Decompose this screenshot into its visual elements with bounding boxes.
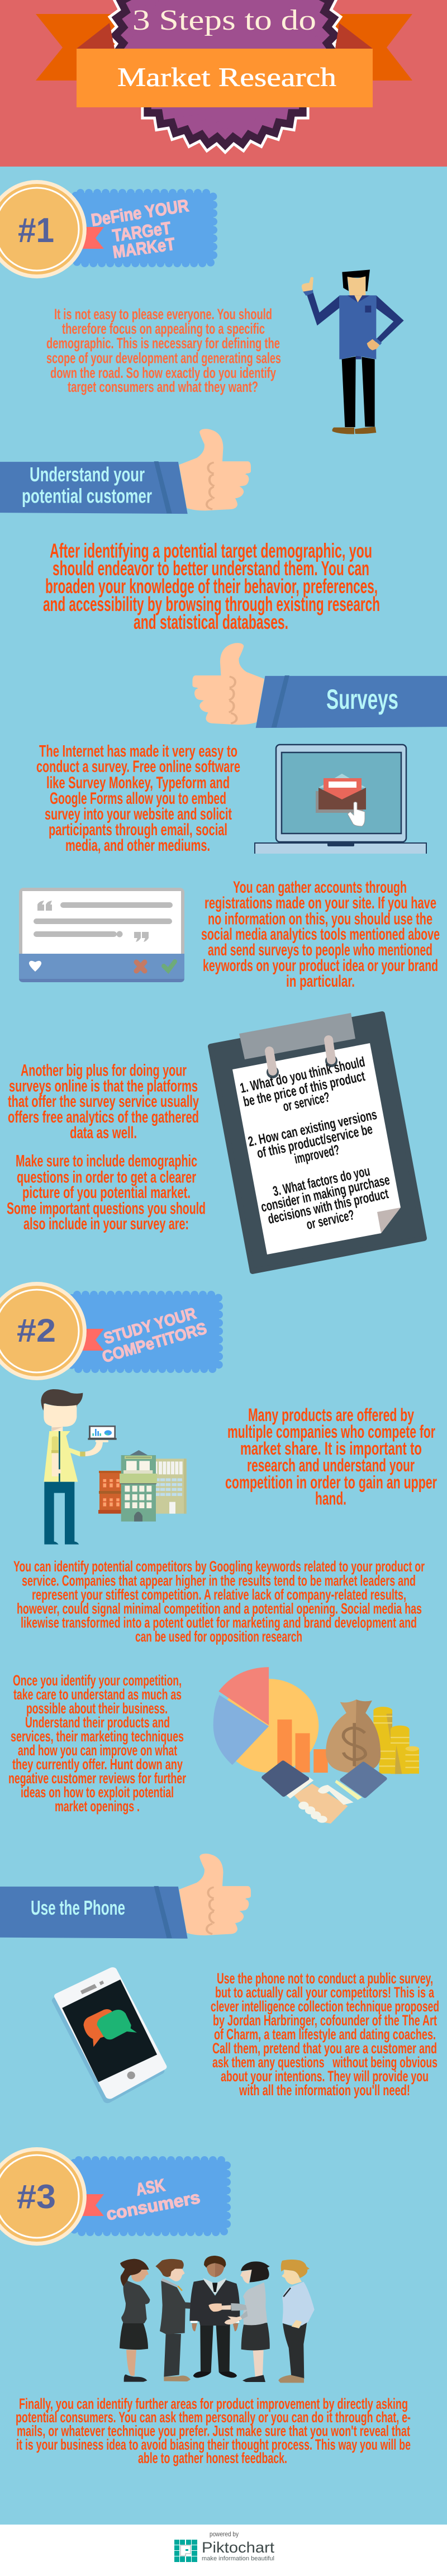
- title line two: Market Research: [117, 63, 336, 92]
- paragraph: analytics and demographics: Another big plus for doing your: [21, 1061, 187, 1080]
- quote marks: [37, 901, 149, 942]
- paragraph: online surveys: The Internet has made it very easy to: [39, 742, 237, 761]
- scalloped label: [75, 193, 213, 263]
- ribbon tails: [36, 14, 412, 80]
- piktochart wordmark: Piktochart: [202, 2539, 275, 2556]
- woman in grey jacket: [222, 2261, 270, 2382]
- intro paragraph: therefore focus on appealing to a specific: [62, 320, 265, 337]
- number 1: #1: [18, 211, 54, 250]
- medal 1: [0, 180, 104, 278]
- heading text: Surveys: [326, 684, 398, 715]
- paragraph: understand competition: Understand their products and: [25, 1714, 170, 1731]
- paragraph: online surveys: media, and other mediums.: [65, 836, 210, 855]
- office buildings: [98, 1450, 187, 1522]
- question list: consider in making purchase: [260, 1172, 391, 1215]
- number 3: #3: [17, 2178, 56, 2215]
- icon: cross: [136, 962, 145, 971]
- heading text: Understand your: [30, 463, 145, 486]
- paragraph: understand competition: ideas on how to exploit potential: [21, 1784, 174, 1801]
- intro paragraph: [46, 306, 281, 395]
- paragraph: understand competition: take care to understand as much as: [13, 1686, 182, 1703]
- paragraph: identify competitors: [13, 1558, 425, 1645]
- heading: understand your potential customer: [0, 429, 251, 514]
- man in centre: [189, 2256, 240, 2378]
- thumbs up sleeve mirrored: [192, 643, 447, 728]
- thumbs up sleeve: [0, 1854, 251, 1939]
- icon: feedback card: [19, 888, 184, 982]
- medal 2: [0, 1282, 104, 1380]
- paragraph: online surveys: survey into your website and solicit: [45, 805, 232, 823]
- icon: check: [164, 962, 175, 970]
- intro paragraph: It is not easy to please everyone. You should: [54, 306, 272, 323]
- paragraph: understand competition: [8, 1672, 186, 1815]
- scalloped label: [73, 2160, 227, 2232]
- paragraph: understanding customers: and statistical databases.: [134, 610, 288, 633]
- step 3 title: consumers: [104, 2187, 202, 2224]
- paragraph: use the phone: [211, 1970, 439, 2099]
- heading text: Use the Phone: [31, 1896, 125, 1919]
- paragraph: online surveys: Google Forms allow you to embed: [50, 789, 226, 808]
- paragraph: analytics and demographics: that offer the survey service usually: [8, 1092, 199, 1111]
- chat bubbles: [83, 2009, 137, 2047]
- footer: [0, 2525, 447, 2576]
- money bag: [326, 1699, 381, 1773]
- heading: use the phone: [0, 1854, 251, 1939]
- header panel: [0, 0, 447, 203]
- coin stacks: [373, 1707, 419, 1774]
- paragraph: analytics and demographics: data as well.: [70, 1124, 137, 1142]
- main banner: [77, 49, 373, 107]
- paragraph: analytics and demographics: surveys online is that the platforms: [9, 1077, 198, 1096]
- paragraph: understand competition: negative customer reviews for further: [8, 1770, 186, 1787]
- pie chart: [213, 1667, 318, 1773]
- woman with crossed arms: [120, 2259, 150, 2382]
- question list: 1. What do you think should: [239, 1054, 367, 1096]
- closing paragraph: able to gather honest feedback.: [138, 2450, 287, 2466]
- medal 3: [0, 2147, 104, 2246]
- question list: be the price of this product: [242, 1068, 367, 1110]
- paragraph: analytics and demographics: Some important questions you should: [7, 1199, 206, 1218]
- step 2 heading: [0, 1282, 219, 1380]
- handshake: [208, 2303, 222, 2312]
- powered by: powered by: [210, 2530, 239, 2538]
- step 1 title: TARGeT: [111, 218, 172, 245]
- illustration: smartphone with chat bubbles: [56, 1971, 163, 2100]
- bar chart: [277, 1720, 328, 1773]
- question list: decisions with this product: [267, 1186, 390, 1227]
- icon: heart: [29, 961, 41, 972]
- step 1 title: [90, 196, 190, 262]
- closing paragraph: [16, 2395, 411, 2466]
- paragraph: online surveys: participants through email, social: [49, 821, 227, 839]
- intro paragraph: target consumers and what they want?: [68, 378, 258, 395]
- paragraph: many products: [225, 1405, 437, 1508]
- paragraph: analytics and demographics: questions in order to get a clearer: [17, 1168, 196, 1187]
- question list: 3. What factors do you: [272, 1163, 372, 1200]
- title line one: 3 Steps to do: [132, 4, 316, 36]
- question list: of this product/service be: [255, 1121, 374, 1162]
- step 1 title: MARKeT: [112, 234, 176, 262]
- thumbs up sleeve: [0, 429, 251, 514]
- paragraph: understand competition: possible about their business.: [26, 1700, 168, 1717]
- question list: improved?: [293, 1142, 341, 1167]
- paragraph: many products: hand.: [315, 1488, 346, 1508]
- intro paragraph: demographic. This is necessary for defining the: [46, 335, 280, 352]
- illustration: charts, money and handshake: [213, 1667, 419, 1824]
- scalloped label: [72, 1295, 219, 1369]
- number 2: #2: [17, 1313, 56, 1349]
- question list: or service?: [305, 1207, 356, 1233]
- heading: surveys: [192, 643, 447, 728]
- step 3 heading: [0, 2147, 227, 2246]
- tagline: make information beautiful: [202, 2555, 274, 2562]
- paragraph: online surveys: [36, 742, 240, 855]
- handshake: [264, 1763, 385, 1824]
- question list: [239, 1054, 391, 1233]
- paragraph: understand competition: market openings .: [55, 1798, 140, 1815]
- intro paragraph: down the road. So how exactly do you identify: [50, 364, 276, 381]
- illustration: man giving thumbs up: [302, 269, 404, 434]
- paragraph: understand competition: and how you can improve on what: [18, 1742, 177, 1759]
- question list: or service?: [282, 1090, 331, 1115]
- step 2 title: STUDY YOUR: [102, 1305, 198, 1348]
- paragraph: analytics and demographics: offers free analytics of the gathered: [8, 1108, 199, 1126]
- step 2 title: COMPeTITORS: [100, 1319, 209, 1366]
- paragraph: online surveys: conduct a survey. Free online software: [36, 757, 240, 776]
- paragraph: understand competition: Once you identify your competition,: [13, 1672, 182, 1689]
- clipboard with survey questions: [211, 1013, 424, 1271]
- step 1 title: DeFine YOUR: [90, 196, 190, 230]
- icon: laptop with email: [254, 745, 427, 854]
- paragraph: understanding customers: [43, 539, 380, 633]
- paragraph: understand competition: they currently offer. Hunt down any: [12, 1756, 183, 1773]
- paragraph: analytics and demographics: [7, 1061, 206, 1233]
- paragraph: analytics and demographics: also include in your survey are:: [23, 1215, 189, 1233]
- paragraph: understand competition: services, their marketing techniques: [11, 1728, 184, 1745]
- heading text: [22, 463, 152, 508]
- piktochart logo mark: [174, 2540, 197, 2562]
- ribbon folds: [77, 23, 373, 49]
- heading text: potential customer: [22, 484, 152, 508]
- man in blue shirt: [278, 2260, 315, 2383]
- illustration: five business people: [120, 2256, 315, 2383]
- paragraph: online surveys: like Survey Monkey, Typeform and: [46, 774, 230, 792]
- intro paragraph: scope of your development and generating sales: [46, 350, 281, 367]
- step 1 heading: [0, 180, 213, 278]
- envelope: [316, 774, 366, 826]
- starburst badge: [57, 0, 393, 203]
- paragraph: analytics and demographics: picture of you potential market.: [22, 1183, 191, 1202]
- paragraph: analytics and demographics: Make sure to include demographic: [16, 1152, 197, 1171]
- paragraph: identify competitors: can be used for opposition research: [135, 1628, 302, 1645]
- question list: 2. How can existing versions: [247, 1107, 378, 1150]
- man with tablet: [41, 1389, 117, 1545]
- paragraph: registrations: in particular.: [286, 972, 355, 991]
- illustration: man with tablet and office buildings: [41, 1389, 187, 1545]
- man in grey suit: [155, 2259, 206, 2381]
- paragraph: registrations: [201, 878, 440, 991]
- step 3 title: ASK: [135, 2175, 167, 2199]
